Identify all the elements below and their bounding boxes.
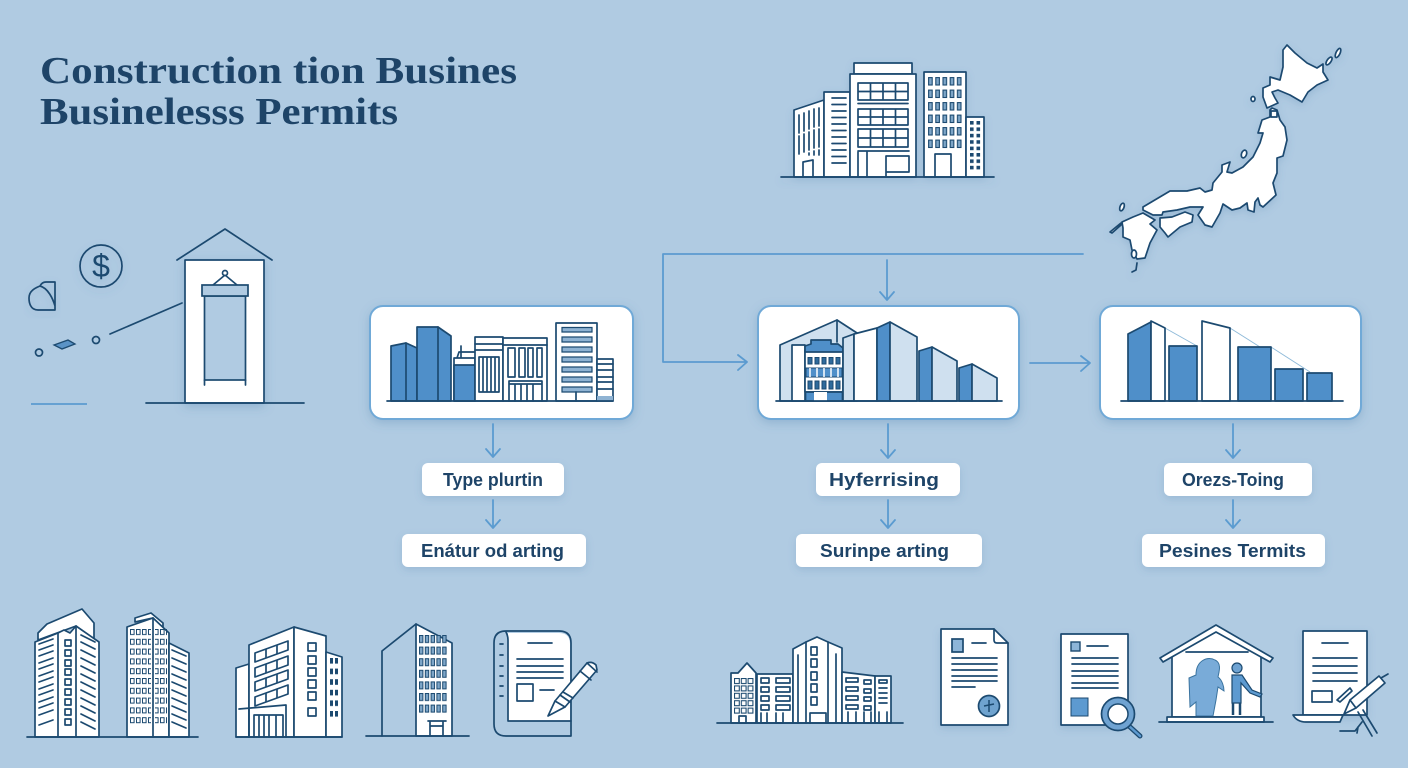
icon: dollar coin: $: [92, 248, 110, 284]
label: Orezs-Toing: Orezs-Toing: [1182, 469, 1284, 490]
icon: shield shape: [29, 282, 55, 310]
icon: contract with signing pen: [1293, 631, 1388, 736]
map: Japan: [1110, 45, 1342, 272]
panel: right card: [1100, 306, 1361, 419]
title: [40, 50, 517, 133]
panel: middle card: [758, 306, 1019, 419]
Honshu: [1143, 108, 1287, 227]
title: Construction tion Busines: [40, 50, 517, 92]
icon: twin towers bottom left: [27, 609, 198, 737]
icon: house with people: [1159, 625, 1273, 722]
arrow: right card to first label: [1226, 424, 1240, 458]
label: Enatur od arting: Enátur od arting: [421, 540, 564, 561]
label: Hyferrising: [816, 463, 960, 496]
title: Businelesss Permits: [40, 91, 398, 133]
arrow: middle card to first label: [881, 424, 895, 458]
label: Pesines Termits: [1142, 534, 1325, 567]
icon: document with magnifier: [1061, 634, 1140, 736]
arrow: first to second label, left: [486, 500, 500, 528]
figure: large person: [1189, 659, 1224, 716]
icon: building cluster top: [781, 63, 994, 177]
icon: dots and connector line: [36, 303, 182, 356]
icon: tall building with banner: [146, 229, 304, 403]
connector lines and arrows: [663, 254, 1090, 371]
accent line: [31, 403, 87, 405]
stepped bars illustration: [1121, 321, 1343, 401]
icon: low-rise complex: [717, 637, 903, 723]
label: Type plurtin: Type plurtin: [443, 469, 543, 490]
label: Type plurtin: [422, 463, 564, 496]
arrow: first to second label, right: [1226, 500, 1240, 528]
icon: certificate document: [941, 629, 1008, 725]
label: Enatur od arting: [402, 534, 586, 567]
Hokkaido: [1263, 45, 1328, 108]
label: Surinpe arting: Surinpe arting: [820, 540, 949, 561]
icon: permit office with sign and coin: [29, 229, 304, 404]
label: Orezs-Toing: [1164, 463, 1312, 496]
arrow: first to second label, middle: [881, 500, 895, 528]
icon: document with pen: [494, 631, 597, 736]
Shikoku: [1160, 212, 1193, 237]
label: Surinpe arting: [796, 534, 982, 567]
label: Pesines Termits: Pesines Termits: [1159, 540, 1306, 561]
islands: [1110, 48, 1342, 272]
arrow: middle to right card: [1030, 356, 1090, 371]
skyline illustration: [387, 323, 613, 401]
figure: small person: [1232, 663, 1262, 715]
label: Hyferrising: Hyferrising: [829, 469, 939, 490]
arrow: left card to first label: [486, 424, 500, 457]
Kyushu: [1122, 213, 1157, 259]
icon: dollar coin: [80, 245, 122, 287]
panel: left card: [370, 306, 633, 419]
perspective buildings illustration: [776, 320, 1002, 401]
arrow: down into middle card: [880, 260, 894, 300]
icon: corner tower: [366, 624, 469, 736]
icon: office building with windows: [236, 627, 342, 737]
